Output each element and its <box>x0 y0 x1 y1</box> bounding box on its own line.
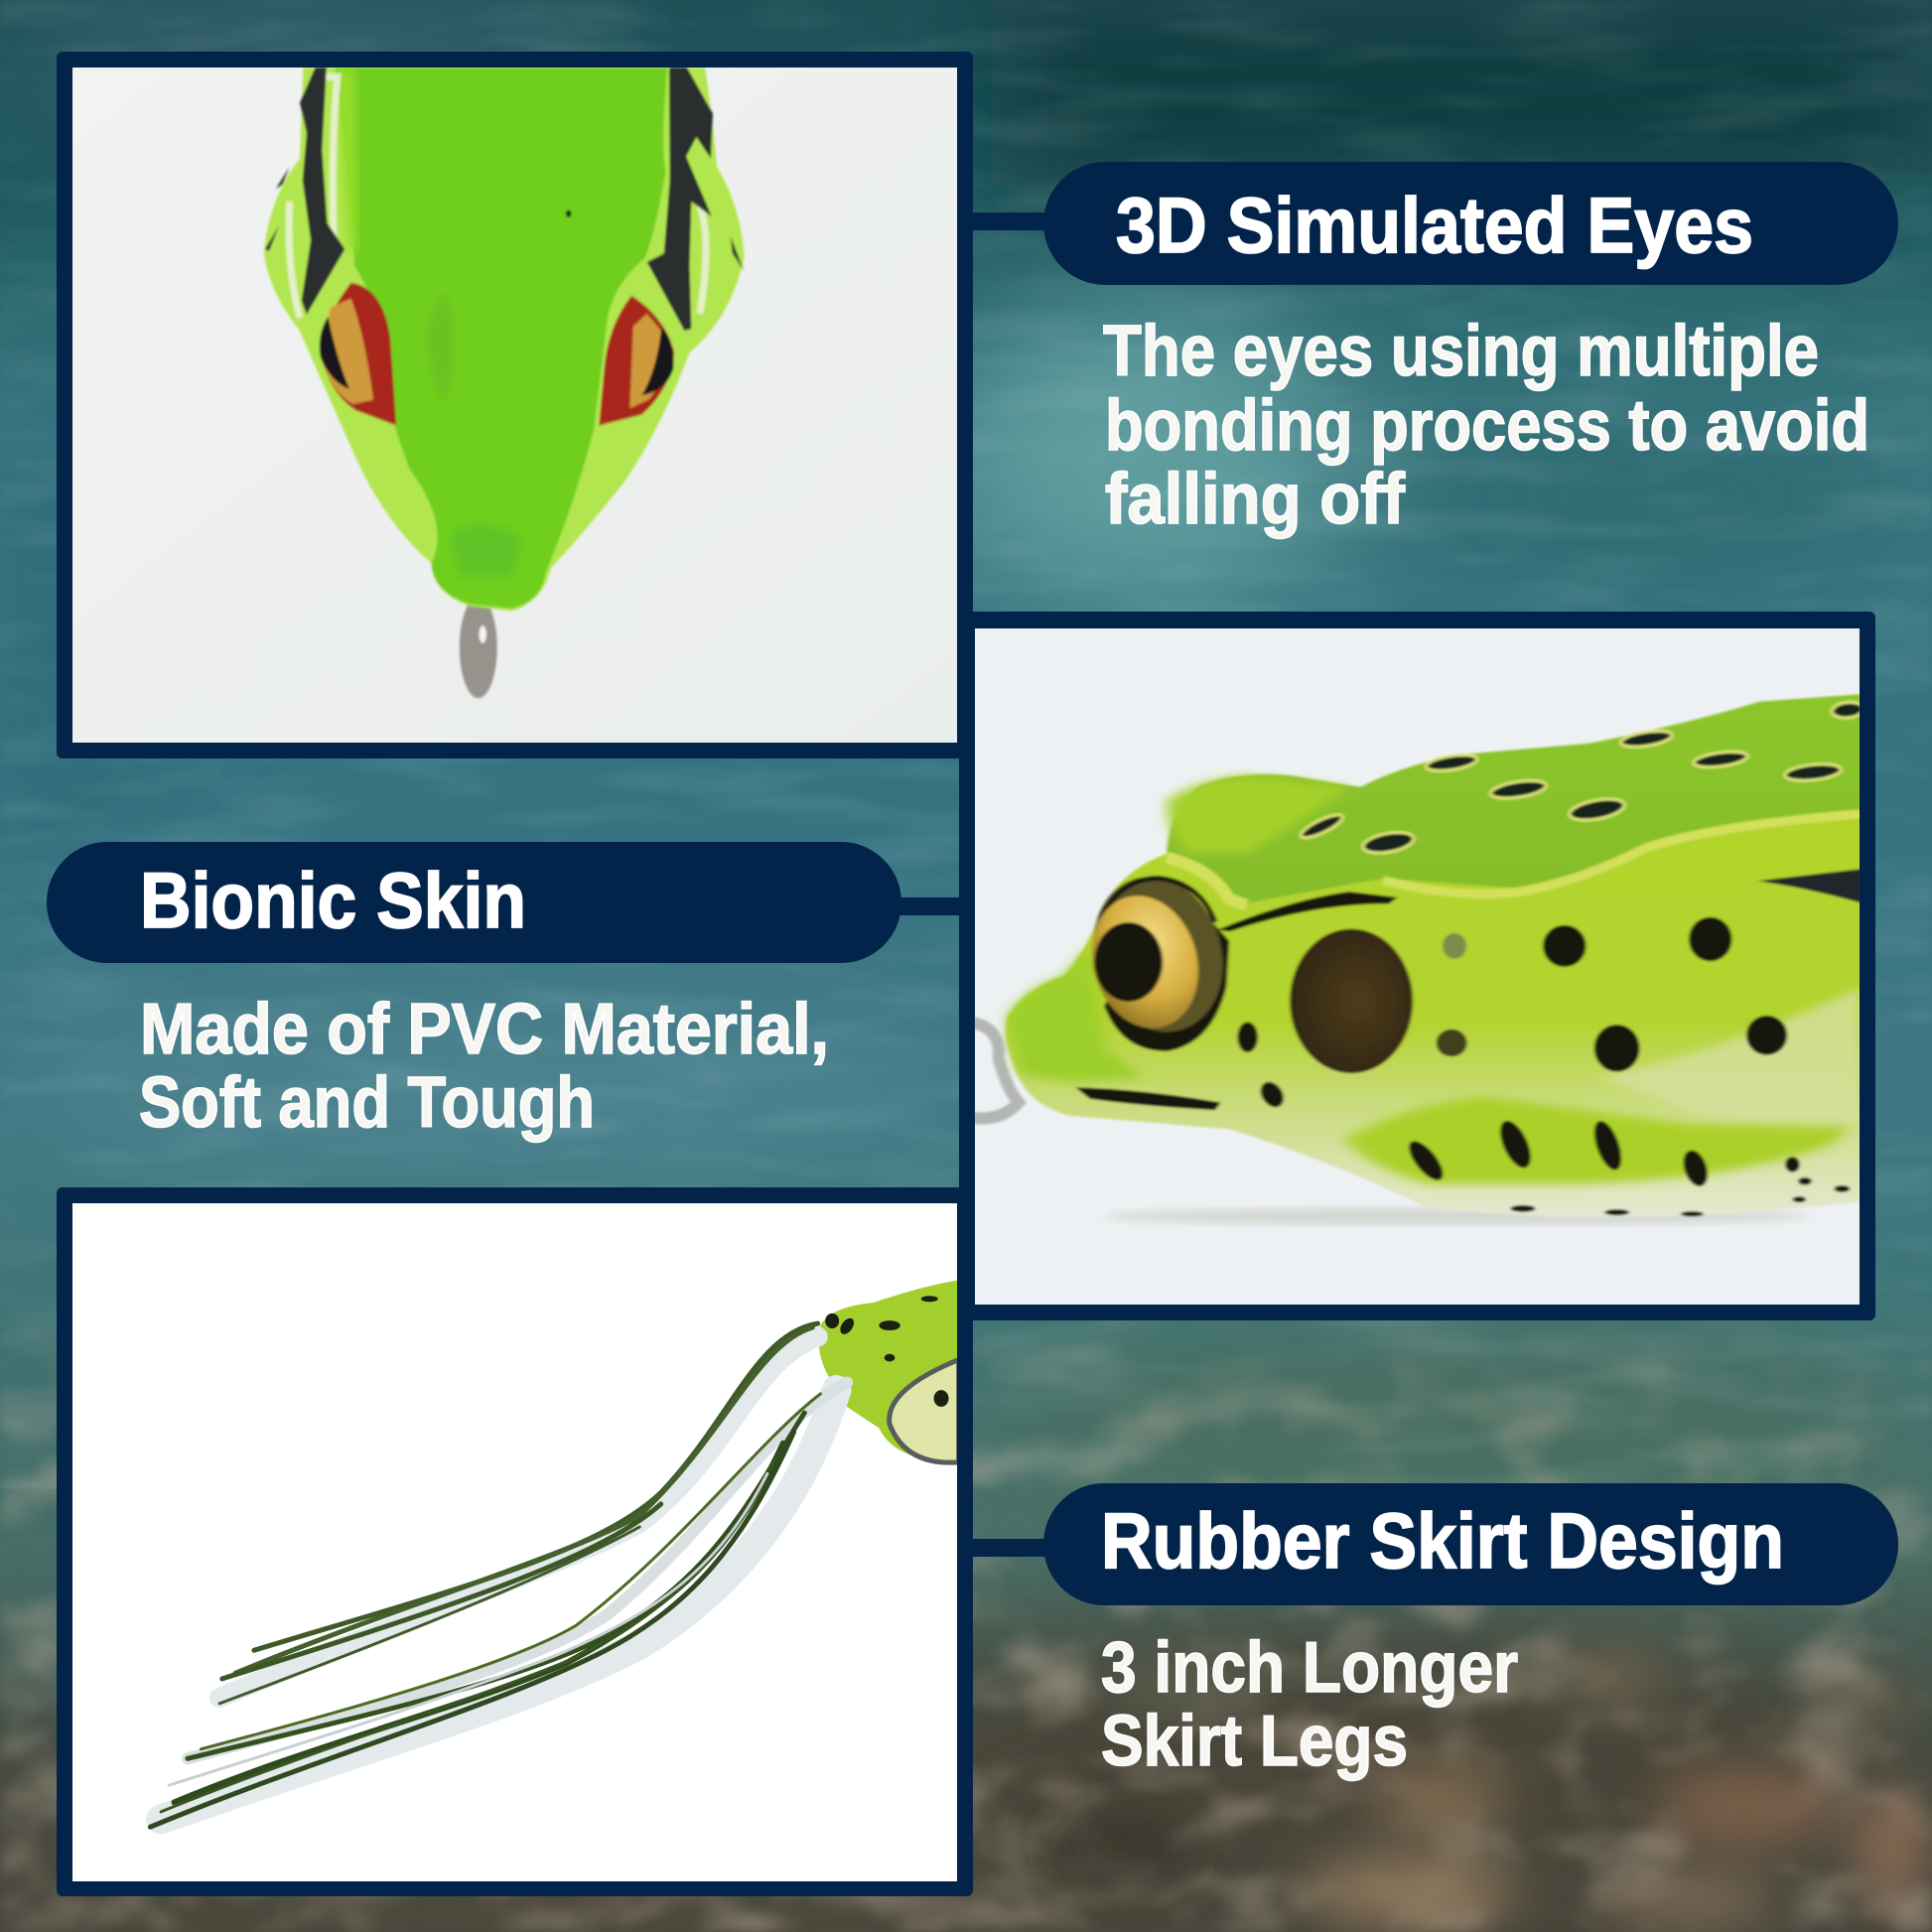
connector: 3D Simulated Eyes <box>968 212 1057 230</box>
ear drum <box>1290 929 1413 1073</box>
panel: bottom-left rubber skirt <box>57 1187 973 1896</box>
eye <box>1104 922 1229 1051</box>
pill heading: Rubber Skirt Design: Rubber Skirt Design <box>1101 1496 1784 1585</box>
upper strand bundle <box>150 1323 847 1827</box>
panel: right frog side view <box>959 612 1875 1320</box>
photo: frog head side view <box>973 694 1865 1226</box>
spots <box>1237 917 1850 1216</box>
pill heading: 3D Simulated Eyes <box>1043 162 1898 285</box>
connector: Rubber Skirt Design <box>968 1539 1057 1557</box>
pill heading: Bionic Skin: Bionic Skin <box>140 856 526 944</box>
text block: skirt description <box>1101 1628 1518 1781</box>
lower strand bundle <box>161 1390 836 1820</box>
text block: eyes description <box>1103 312 1869 539</box>
mouth <box>1075 1087 1221 1110</box>
hook ring <box>973 1023 1019 1118</box>
right eye <box>599 296 674 426</box>
photo: skirt strands and frog <box>150 1280 959 1827</box>
text block: skirt description: Skirt Legs <box>1101 1702 1408 1781</box>
text block: skin description <box>139 990 829 1143</box>
hook point <box>1756 869 1862 903</box>
panel: top-left frog front view <box>57 52 973 759</box>
text block: skin description: Made of PVC Material, <box>140 990 829 1069</box>
pill heading: Rubber Skirt Design <box>1043 1483 1898 1605</box>
back spots <box>1297 700 1865 857</box>
text block: eyes description: The eyes using multiple <box>1103 312 1819 391</box>
black stripes <box>265 68 744 331</box>
text block: skirt description: 3 inch Longer <box>1101 1628 1518 1708</box>
frog fragment <box>819 1280 959 1462</box>
pill heading: 3D Simulated Eyes: 3D Simulated Eyes <box>1116 181 1753 269</box>
left eye <box>320 283 396 426</box>
connector: Bionic Skin <box>889 897 973 915</box>
pill heading: Bionic Skin <box>47 842 901 963</box>
text block: eyes description: falling off <box>1105 460 1406 539</box>
hook eye <box>460 597 497 698</box>
photo: frog head top view <box>264 68 745 698</box>
text block: skin description: Soft and Tough <box>139 1063 595 1143</box>
